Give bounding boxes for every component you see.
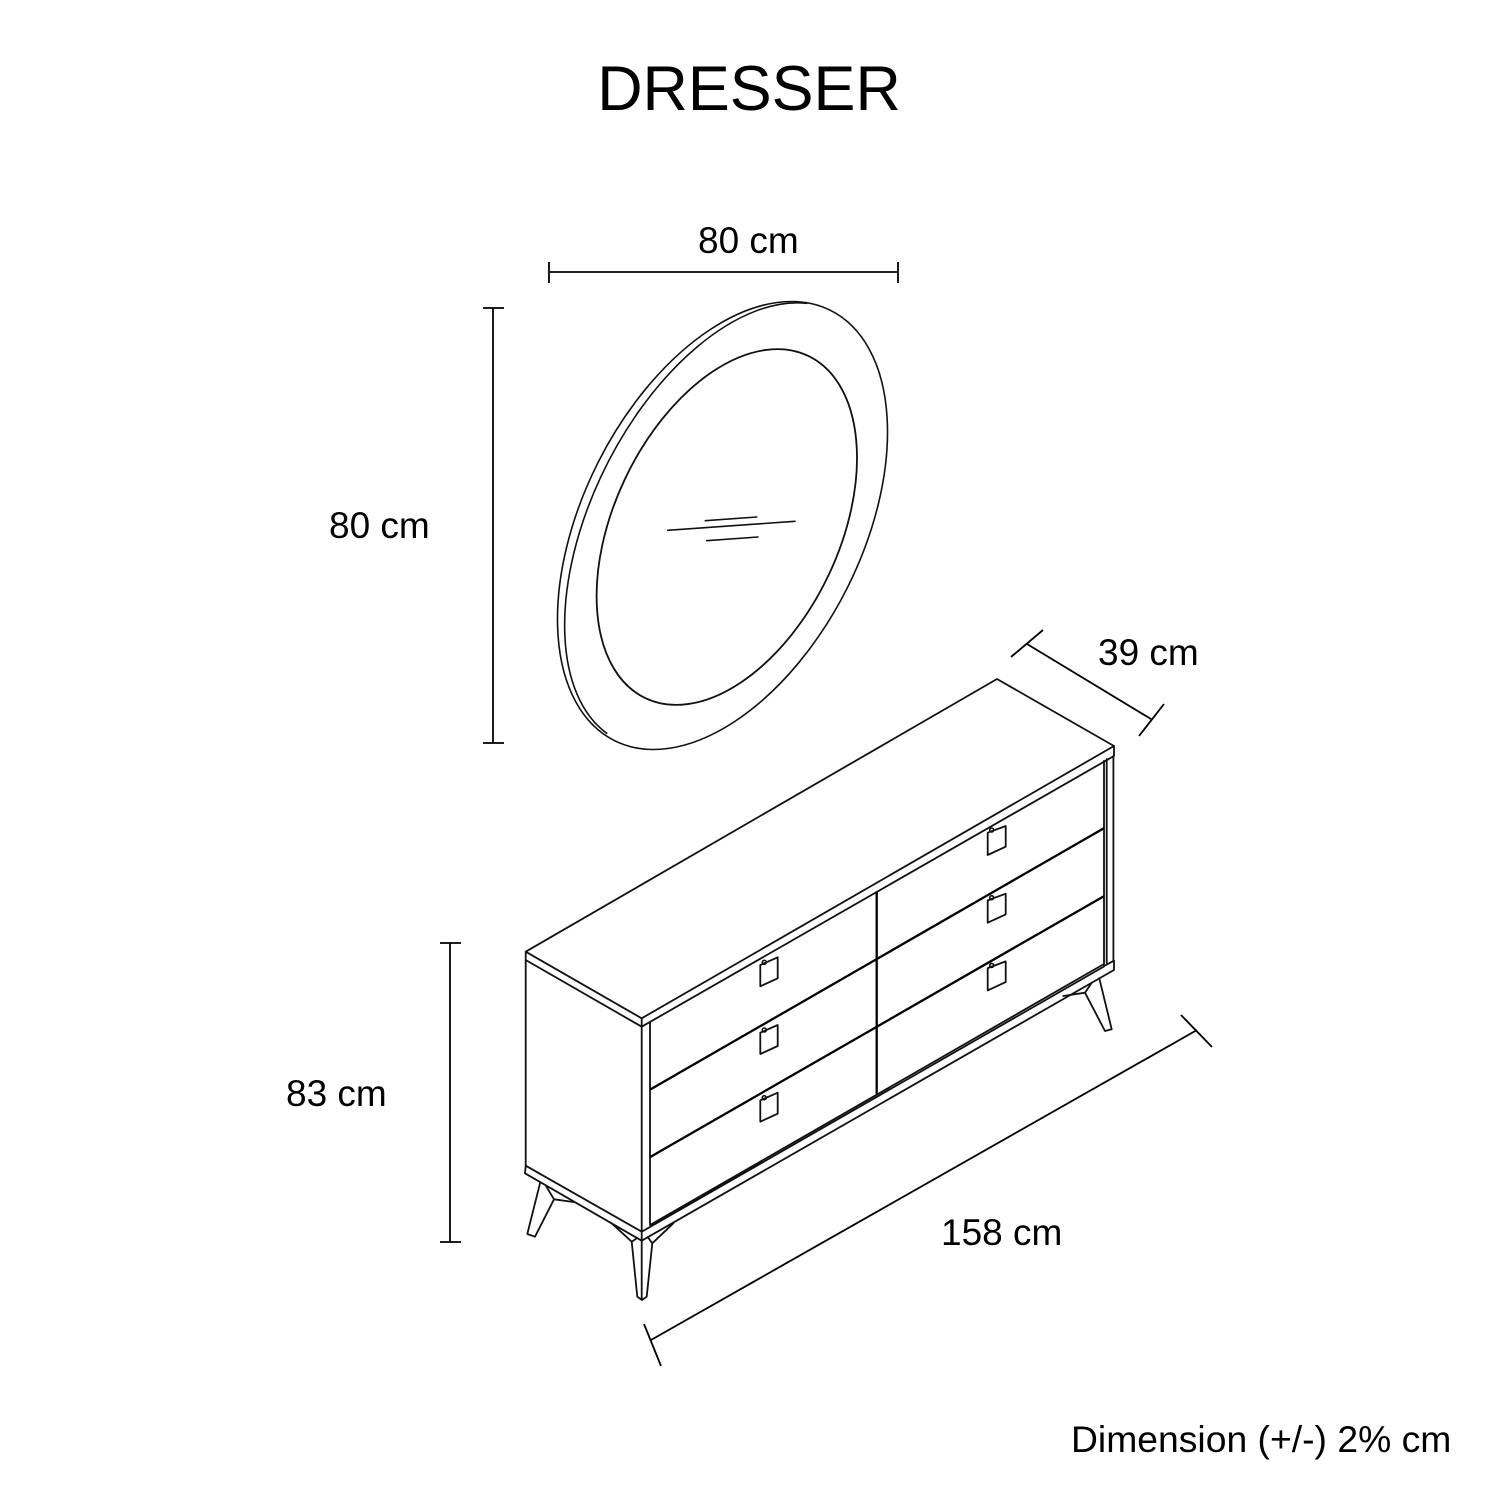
handle left top (760, 957, 778, 986)
handle left middle (760, 1025, 778, 1054)
title: DRESSER (597, 54, 901, 124)
handle right bottom (988, 961, 1006, 990)
drawer dividers (651, 829, 1103, 1157)
mirror width dimension: 80 cm (698, 220, 799, 261)
dresser (525, 679, 1114, 1300)
mirror frame edge (565, 303, 807, 733)
dresser plinth (525, 961, 1114, 1241)
dresser width dimension (644, 1015, 1212, 1366)
dresser height dimension (286, 943, 461, 1242)
right leg (1063, 978, 1112, 1031)
handles (760, 826, 1006, 1122)
handle right middle (988, 894, 1006, 923)
mirror height dimension (329, 308, 504, 743)
mirror width dimension (549, 220, 898, 283)
tolerance note: Dimension (+/-) 2% cm (1071, 1418, 1451, 1460)
dresser top (526, 679, 1114, 1027)
front corner leg (612, 1223, 673, 1300)
mirror height dimension: 80 cm (329, 505, 430, 546)
dresser front frame (642, 756, 1113, 1232)
dresser height dimension: 83 cm (286, 1073, 387, 1114)
rear left leg (527, 1183, 573, 1237)
handle left bottom (760, 1093, 778, 1122)
dresser depth dimension (1011, 630, 1199, 736)
dresser side panel (526, 960, 642, 1232)
mirror glass (544, 308, 910, 746)
dresser depth dimension: 39 cm (1098, 632, 1199, 673)
mirror reflection lines (668, 517, 795, 541)
mirror outer frame (490, 248, 955, 803)
dresser width dimension: 158 cm (941, 1212, 1062, 1253)
handle right top (988, 826, 1006, 855)
round mirror (490, 248, 955, 803)
